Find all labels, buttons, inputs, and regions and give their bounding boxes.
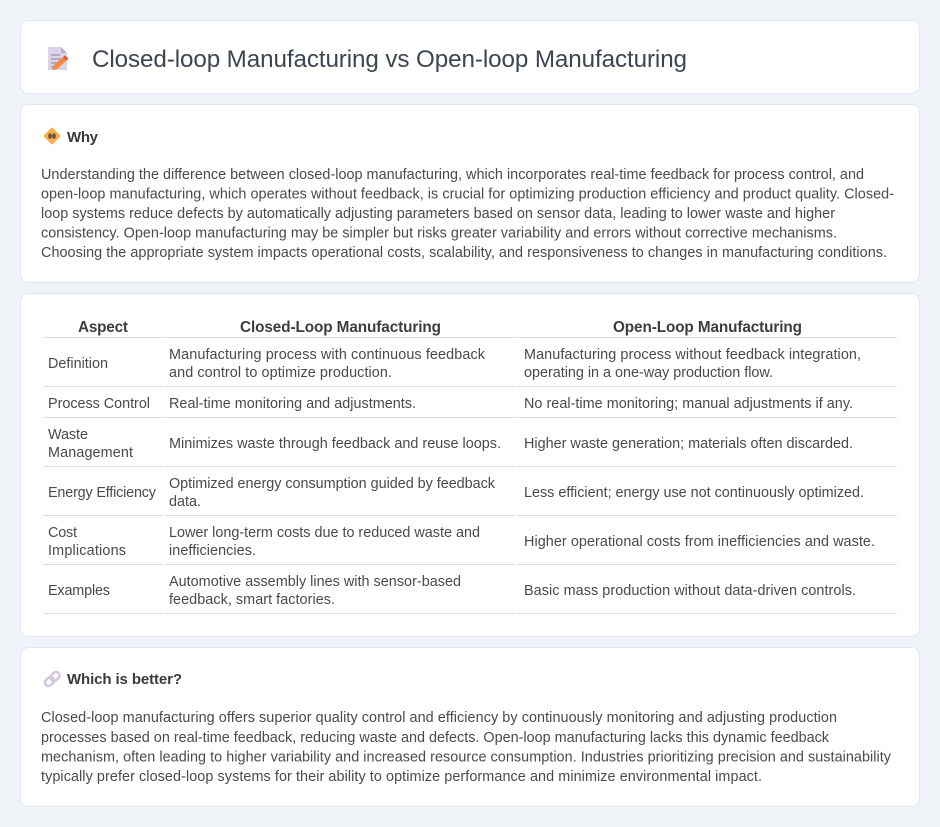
text block: why paragraph: consistency. Open-loop manufacturing may be simpler but risks greater variability and errors without corrective mechanisms. <box>41 226 837 242</box>
table header: Aspect <box>78 319 128 336</box>
text block: why paragraph: open-loop manufacturing, which operates without feedback, is crucial for optimizing production efficiency and product quality. Closed- <box>41 186 894 202</box>
row: process control: Process Control <box>48 396 150 412</box>
row: process control <box>48 396 853 412</box>
text block: which is better paragraph <box>41 710 892 785</box>
panel: why <box>20 104 920 282</box>
row: waste management <box>48 427 853 461</box>
icon: warning diamond <box>44 128 60 144</box>
table header: Open-Loop Manufacturing <box>613 319 802 336</box>
row: definition: Manufacturing process without feedback integration, <box>524 347 861 363</box>
row: examples: Basic mass production without data-driven controls. <box>524 583 856 599</box>
panel: title header <box>20 20 920 94</box>
text block: which is better paragraph: mechanism, often leading to higher variability and increased resource consumption. Industries prioritizing precision and sustainability <box>41 750 892 766</box>
row: cost implications: Lower long-term costs due to reduced waste and <box>169 525 480 541</box>
row: definition: Manufacturing process with continuous feedback <box>169 347 486 363</box>
panel: which is better <box>20 648 920 806</box>
row: definition: and control to optimize production. <box>169 365 392 381</box>
row: cost implications: Higher operational costs from inefficiencies and waste. <box>524 534 875 550</box>
row: examples: feedback, smart factories. <box>169 592 335 608</box>
table header <box>78 319 802 336</box>
icon: memo with pencil <box>48 47 68 70</box>
title: Closed-loop Manufacturing vs Open-loop Manufacturing <box>92 46 687 73</box>
row: energy efficiency <box>48 476 864 510</box>
row: waste management: Waste <box>48 427 88 443</box>
panel: comparison table <box>20 294 920 636</box>
row: definition: operating in a one-way production flow. <box>524 365 773 381</box>
text block: why paragraph <box>41 167 894 261</box>
text block: which is better paragraph: typically prefer closed-loop systems for their ability to optimize performance and minimize environmental impact. <box>41 769 762 785</box>
row: energy efficiency: data. <box>169 494 201 510</box>
icon: chain link <box>43 670 61 688</box>
text block: why paragraph: loop systems reduce defects by automatically adjusting parameters based on sensor data, leading to lower waste and higher <box>41 206 835 222</box>
row: definition <box>48 347 861 381</box>
row: definition: Definition <box>48 356 108 372</box>
heading: why: Why <box>67 129 99 146</box>
row: examples: Automotive assembly lines with sensor-based <box>169 574 461 590</box>
text block: which is better paragraph: Closed-loop manufacturing offers superior quality control and efficiency by continuously monitoring and adjusting production <box>41 710 837 726</box>
row: process control: No real-time monitoring; manual adjustments if any. <box>524 396 853 412</box>
row: waste management: Minimizes waste through feedback and reuse loops. <box>169 436 501 452</box>
row: waste management: Management <box>48 445 133 461</box>
row: cost implications <box>48 525 875 559</box>
text block: why paragraph: Understanding the difference between closed-loop manufacturing, which incorporates real-time feedback for process control, and <box>41 167 864 183</box>
row: waste management: Higher waste generation; materials often discarded. <box>524 436 853 452</box>
heading: which is better: Which is better? <box>67 671 182 688</box>
row: energy efficiency: Less efficient; energy use not continuously optimized. <box>524 485 864 501</box>
text block: which is better paragraph: processes based on real-time feedback, reducing waste and defects. Open-loop manufacturing lacks this dynamic feedback <box>41 730 830 746</box>
table header: Closed-Loop Manufacturing <box>240 319 441 336</box>
row: examples <box>48 574 856 608</box>
row: process control: Real-time monitoring and adjustments. <box>169 396 416 412</box>
row: examples: Examples <box>48 583 110 599</box>
text block: why paragraph: Choosing the appropriate system impacts operational costs, scalability, and responsiveness to changes in manufacturing conditions. <box>41 245 887 261</box>
row: cost implications: Implications <box>48 543 126 559</box>
row: energy efficiency: Optimized energy consumption guided by feedback <box>169 476 496 492</box>
row: cost implications: inefficiencies. <box>169 543 256 559</box>
row: energy efficiency: Energy Efficiency <box>48 485 157 501</box>
row: cost implications: Cost <box>48 525 77 541</box>
